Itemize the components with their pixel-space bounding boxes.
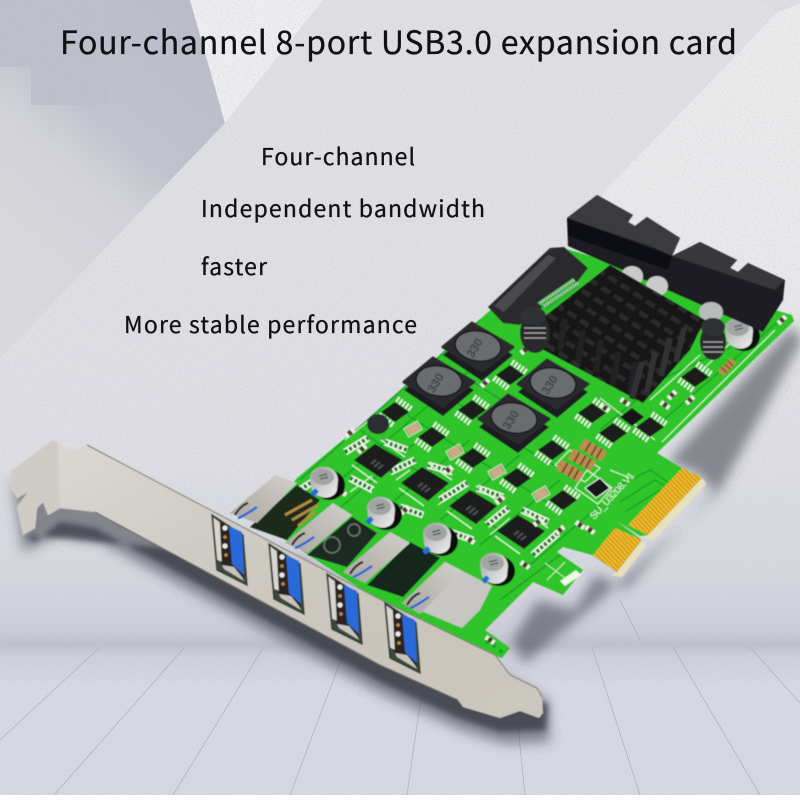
white strip at the bottom <box>0 795 800 800</box>
feature: four-channel: Four-channel <box>261 138 415 172</box>
white tag and recycling mark <box>545 562 581 586</box>
PCB traces <box>300 320 780 600</box>
internal USB header connectors <box>567 195 785 332</box>
power inductors marked 330: 330 <box>499 407 522 432</box>
SATA power connector <box>488 247 588 325</box>
resistor arrays <box>300 438 558 555</box>
silkscreen outlines <box>345 320 775 535</box>
power inductors marked 330 <box>404 323 588 453</box>
top-right corner sliver <box>760 0 800 12</box>
IC row: small regulators <box>367 362 711 513</box>
feature list <box>124 138 485 340</box>
rear capacitor tops <box>621 266 723 322</box>
metal bracket <box>10 440 543 718</box>
title: Four-channel 8-port USB3.0 expansion card <box>60 18 737 64</box>
board silkscreen text: SU_U3208.V1 <box>588 470 637 522</box>
left wall facet <box>0 0 225 358</box>
coil chokes <box>520 307 726 360</box>
right pale facet <box>600 4 800 420</box>
feature: independent bandwidth: Independent bandwidth <box>201 190 485 224</box>
floor seams <box>0 600 800 795</box>
power inductors marked 330: 330 <box>538 372 561 397</box>
power inductors marked 330: 330 <box>463 335 486 360</box>
capacitors <box>310 318 760 586</box>
resistors <box>336 315 787 645</box>
PCB board <box>262 248 794 658</box>
bracket contact shadow <box>25 522 548 732</box>
feature: faster: faster <box>201 248 267 282</box>
tan components <box>404 358 736 502</box>
tail mounting dots <box>485 640 503 653</box>
bright triangular facet <box>190 0 323 123</box>
expansion card <box>10 195 800 744</box>
daughter board under USB ports <box>250 485 440 597</box>
USB 3.0 ports <box>212 515 420 673</box>
top-left darker block <box>0 0 110 105</box>
feature: stable performance: More stable performance <box>124 306 417 340</box>
USB port metal shells <box>230 475 492 628</box>
heat sink <box>540 265 705 403</box>
floor <box>0 645 800 795</box>
card shadow <box>12 326 800 744</box>
IC row: large controller chips <box>352 440 548 554</box>
power inductors marked 330: 330 <box>424 370 447 395</box>
PCIe edge connector <box>593 468 706 577</box>
